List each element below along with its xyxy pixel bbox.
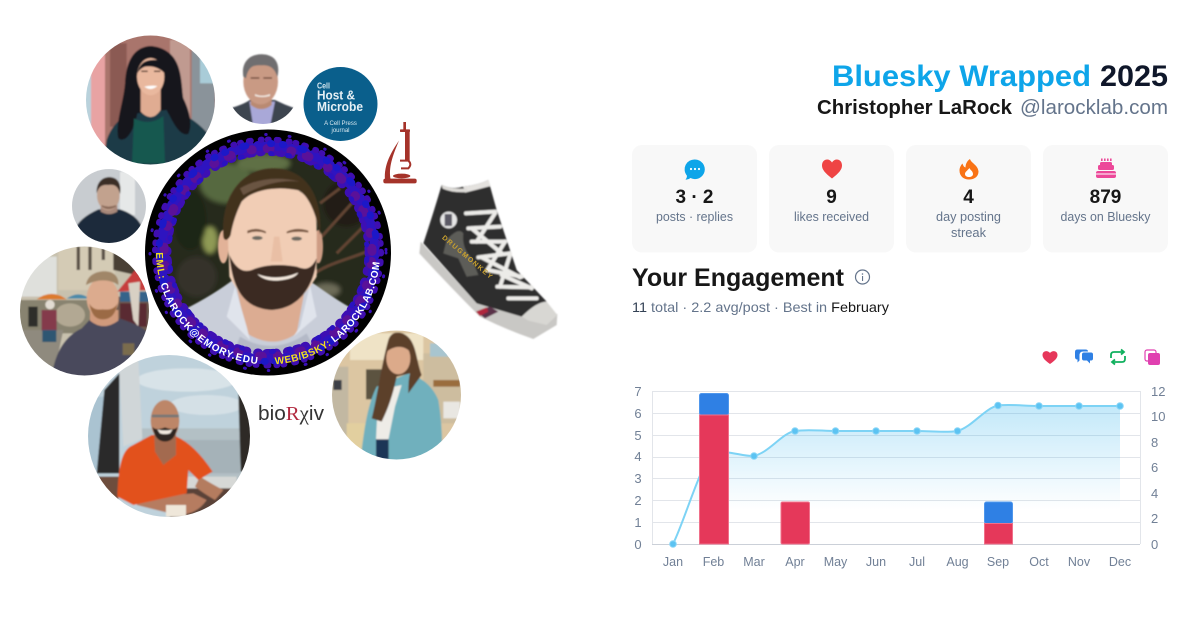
month labels: Apr: [785, 555, 805, 569]
stat card: likes: 9: [826, 187, 837, 208]
logo: Cell Host and Microbe: journal: [330, 128, 350, 134]
left axis labels: 1: [634, 515, 642, 530]
sneaker illustration: DRUGMONKEY: [440, 235, 494, 281]
right axis labels: 10: [1151, 409, 1165, 424]
logo: Cell Host and Microbe: [304, 67, 378, 141]
month labels: Sep: [987, 555, 1009, 569]
month labels: Jan: [663, 555, 683, 569]
ring text: web and bluesky handle: WEB/BSKY: LAROCKLAB.COM: [274, 262, 380, 364]
right axis labels: 6: [1151, 460, 1158, 475]
stat card: likes: [769, 145, 894, 252]
icon: heart: [822, 160, 842, 178]
stat card: streak: [906, 145, 1031, 252]
avatar collage: [20, 36, 558, 517]
line markers: [670, 402, 1123, 547]
user name: Christopher LaRock: [817, 97, 1013, 119]
icon: flame: [960, 159, 978, 180]
logo: Cell Host and Microbe: A Cell Press: [324, 121, 357, 127]
month labels: [663, 555, 1131, 569]
header: title and user: [817, 60, 1168, 119]
right axis labels: 4: [1151, 486, 1158, 501]
month labels: Feb: [703, 555, 724, 569]
stat card: posts and replies: 3 · 2: [675, 187, 714, 208]
left axis labels: [634, 384, 642, 552]
avatar: man on busy street: [20, 246, 149, 376]
month labels: Jul: [909, 555, 925, 569]
stat card: days on Bluesky: 879: [1090, 187, 1121, 208]
area under cumulative line: [673, 405, 1120, 544]
icon: birthday cake: [1096, 158, 1116, 178]
stat card: streak: streak: [951, 225, 986, 240]
avatar: woman in teal lab coat: [330, 330, 463, 463]
right axis labels: 0: [1151, 537, 1158, 552]
grid lines: [652, 391, 1140, 544]
title year: 2025: [1100, 60, 1168, 93]
left axis labels: 6: [634, 406, 642, 421]
stat card: posts and replies: [632, 145, 757, 252]
stat card: posts and replies: posts · replies: [656, 209, 733, 224]
portrait photo: [167, 152, 370, 354]
logo: Cell Host and Microbe: Host &: [317, 88, 355, 102]
left axis labels: 2: [634, 493, 642, 508]
legend icon: replies bubbles: [1075, 350, 1093, 364]
month labels: May: [824, 555, 848, 569]
left axis labels: 7: [634, 384, 642, 399]
bar: February: [700, 394, 728, 544]
stat card: streak: day posting: [936, 209, 1001, 224]
left axis labels: 4: [634, 449, 642, 464]
right axis labels: [1151, 384, 1165, 552]
engagement chart: [634, 384, 1165, 569]
logo: Cell Host and Microbe: Cell: [317, 80, 330, 90]
logo: bioRxiv: bioRχiv: [258, 403, 324, 425]
right axis labels: 2: [1151, 511, 1158, 526]
left axis labels: 0: [634, 537, 642, 552]
avatar: older man in suit: [230, 54, 295, 127]
legend icon: quotes: [1145, 350, 1160, 365]
bar: September: [984, 502, 1012, 544]
right axis labels: 12: [1151, 384, 1165, 399]
main profile avatar with badge ring: [145, 130, 391, 376]
avatar: man in navy sweater: [72, 169, 146, 243]
stat card: days on Bluesky: days on Bluesky: [1060, 209, 1151, 224]
sneaker illustration: [419, 180, 557, 339]
legend icon: reposts: [1111, 350, 1125, 364]
stat card: likes: likes received: [794, 209, 869, 224]
avatar: woman with dark curly hair: [83, 33, 217, 167]
bar: April: [781, 502, 810, 544]
month labels: Oct: [1029, 555, 1049, 569]
stat card: streak: 4: [963, 187, 974, 208]
chart legend: [1042, 350, 1160, 365]
left axis labels: 3: [634, 471, 642, 486]
month labels: Jun: [866, 555, 886, 569]
title: Bluesky Wrapped: [832, 60, 1091, 93]
engagement summary: 11 total · 2.2 avg/post · Best in February: [632, 299, 889, 315]
logo: Cell Host and Microbe: Microbe: [317, 100, 363, 114]
cumulative line: [673, 405, 1120, 544]
month labels: Nov: [1068, 555, 1091, 569]
icon: microscope: [383, 122, 417, 183]
avatar: man in orange shirt at window: [87, 353, 253, 520]
month labels: Dec: [1109, 555, 1131, 569]
right axis labels: 8: [1151, 435, 1158, 450]
month labels: Aug: [946, 555, 969, 569]
ring text: email and web address: EML: CLAROCK@EMORY.EDU: [156, 252, 258, 364]
icon: chat bubble: [685, 159, 705, 180]
icon: info: [856, 270, 870, 284]
user handle: @larocklab.com: [1020, 97, 1168, 119]
heading: Your Engagement: Your Engagement: [632, 264, 845, 292]
stat card: days on Bluesky: [1043, 145, 1168, 252]
legend icon: likes heart: [1042, 351, 1058, 364]
left axis labels: 5: [634, 428, 642, 443]
month labels: Mar: [743, 555, 765, 569]
decorative purple dotted ring: [150, 134, 386, 370]
